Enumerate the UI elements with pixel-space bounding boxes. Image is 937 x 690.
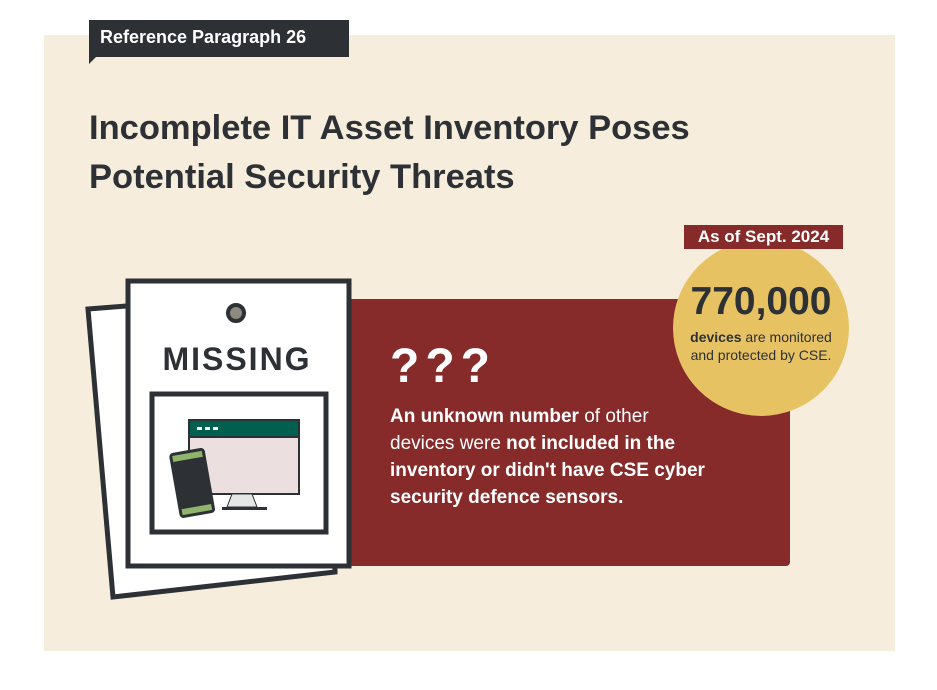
title — [89, 109, 690, 196]
panel: red info box — [340, 299, 790, 566]
title: Incomplete IT Asset Inventory Poses — [89, 109, 690, 147]
illustration: missing poster: MISSING — [162, 341, 312, 377]
label: as of date: As of Sept. 2024 — [698, 227, 829, 246]
circle: 770,000 devices — [673, 240, 849, 416]
circle: 770,000 devices: devices are monitored — [690, 329, 832, 345]
question marks: ??? — [390, 340, 496, 393]
text: unknown devices: security defence sensors. — [390, 487, 623, 508]
text: unknown devices: inventory or didn't have CSE cyber — [390, 460, 705, 481]
tag: reference paragraph: Reference Paragraph 26 — [100, 27, 306, 47]
tag: reference paragraph — [89, 20, 349, 64]
circle: 770,000 devices: and protected by CSE. — [691, 347, 831, 363]
circle: 770,000 devices: 770,000 — [690, 280, 831, 323]
label: as of date — [684, 225, 843, 249]
title: Potential Security Threats — [89, 158, 515, 196]
text: unknown devices: An unknown number of other — [390, 406, 649, 427]
text: unknown devices — [390, 406, 705, 508]
text: unknown devices: devices were not included in the — [390, 433, 675, 454]
